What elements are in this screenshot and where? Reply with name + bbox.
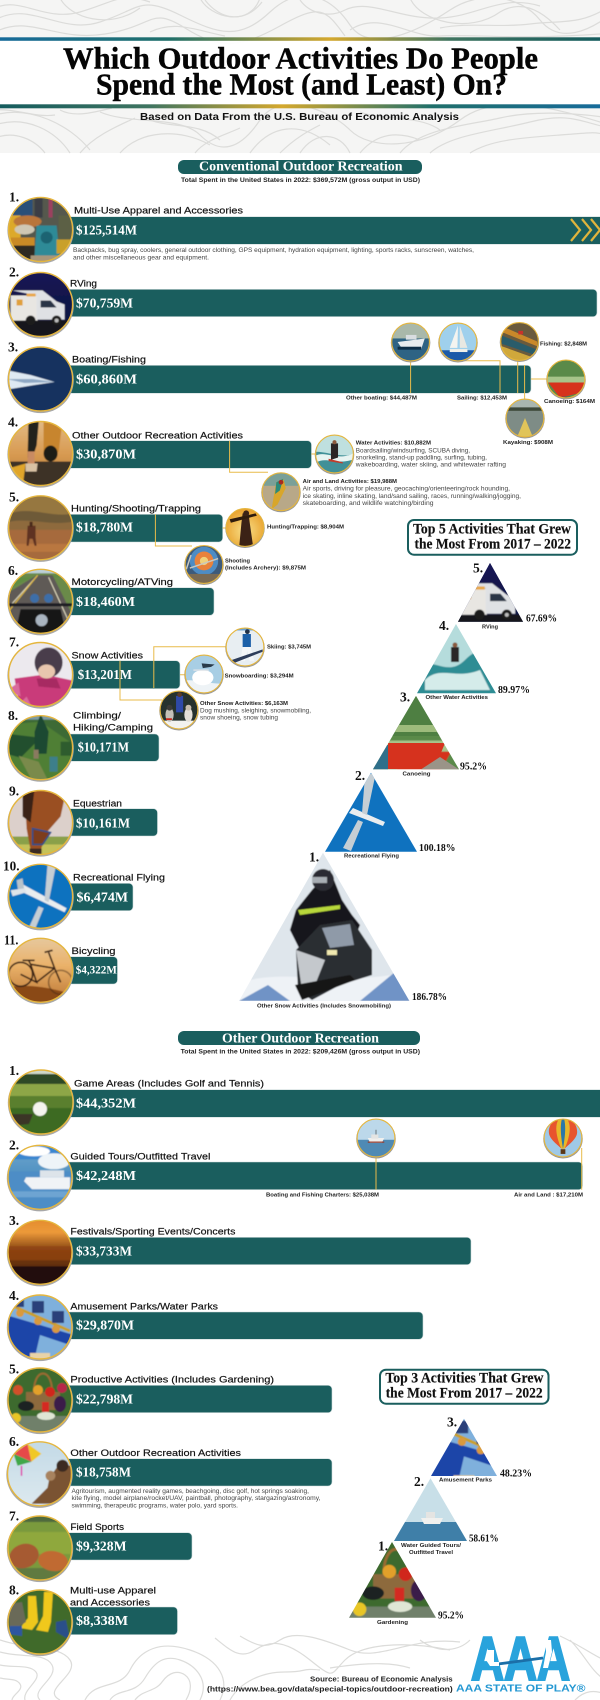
- callout: top 3 activities: [380, 1370, 548, 1404]
- text: air and land activities: Air and Land Activities: $19,988M: [303, 479, 397, 485]
- icon: water activities: [314, 434, 354, 474]
- row 5: hunting/shooting/trapping: (Includes Archery): $9,875M: [225, 566, 306, 572]
- text: water activities: wakeboarding, water skiing, and whitewater rafting: [355, 462, 506, 469]
- logo: AAA State of Play: AAA STATE OF PLAY®: [456, 1683, 586, 1695]
- other row 1: game areas: 1.: [9, 1063, 19, 1078]
- text: air and land activities: [303, 479, 521, 507]
- row 10: recreational flying: Recreational Flying: [73, 872, 165, 883]
- other row 6: other outdoor recreation activities: 6.: [9, 1434, 19, 1449]
- other row 6: other outdoor recreation activities: swimming, therapeutic programs, water polo, yard sports.: [72, 1502, 238, 1509]
- text: air and land activities: ice skating, inline skating, land/sand sailing, races, running/walking/jogging,: [303, 493, 521, 500]
- other row 5: productive activities: Productive Activities (Includes Gardening): [70, 1374, 274, 1385]
- other row 4: amusement parks: [6, 1291, 424, 1362]
- row 7: snow activities: Skiing: $3,745M: [267, 645, 311, 651]
- row 6: motorcycling: 6.: [8, 563, 18, 578]
- other row 3: festivals: 3.: [9, 1213, 19, 1228]
- triangle: gardening 1st: 1.: [378, 1539, 388, 1554]
- source note: (https://www.bea.gov/data/special-topics/outdoor-recreation): [207, 1685, 453, 1694]
- row 10: recreational flying: [4, 862, 164, 930]
- row 7: snow activities: Snow Activities: [72, 650, 143, 661]
- heading: conventional outdoor recreation: Total Spent in the United States in 2022: $369,572M (gross output in USD): [181, 177, 420, 184]
- row 11: bicycling: [4, 936, 118, 1004]
- triangle: water guided tours 2nd: Outfitted Travel: [409, 1550, 453, 1556]
- row 3: boating/fishing: Canoeing: $164M: [544, 399, 595, 405]
- row 3: boating/fishing: [7, 322, 595, 445]
- triangle: canoeing 3rd: Canoeing: [402, 771, 431, 777]
- row 3: boating/fishing: Boating/Fishing: [72, 355, 146, 366]
- row 1: multi-use apparel: and other miscellaneous gear and equipment.: [73, 254, 209, 261]
- icon: chevrons: [571, 219, 600, 241]
- callout: top 3 activities: the Most From 2017 – 2022: [386, 1386, 543, 1402]
- row 3: boating/fishing: $60,860M: [76, 372, 137, 387]
- triangle: other water activities 4th: [417, 621, 529, 699]
- triangle: amusement parks 3rd: 48.23%: [500, 1468, 532, 1479]
- other row 1: game areas: $44,352M: [76, 1096, 136, 1111]
- other row 8: multi-use apparel: 8.: [9, 1583, 19, 1598]
- icon: skiing: [225, 628, 265, 668]
- other row 6: other outdoor recreation activities: Other Outdoor Recreation Activities: [70, 1448, 241, 1459]
- triangle: gardening 1st: Gardening: [377, 1620, 408, 1626]
- row 7: snow activities: Snowboarding: $3,294M: [225, 674, 294, 680]
- row 2: RVing: [7, 268, 598, 339]
- row 2: RVing: RVing: [70, 279, 97, 290]
- text: water activities: snorkeling, stand-up paddling, surfing, tubing,: [356, 455, 487, 462]
- row 4: other outdoor recreation activities: [7, 418, 520, 512]
- other row 4: amusement parks: $29,870M: [76, 1319, 134, 1334]
- triangle: recreational flying 2nd: 2.: [355, 768, 365, 783]
- triangle: canoeing 3rd: 3.: [400, 690, 410, 705]
- other row 2: guided tours: 2.: [9, 1137, 19, 1152]
- title: Spend the Most (and Least) On?: [96, 66, 507, 101]
- row 5: hunting/shooting/trapping: Hunting/Trapping: $8,904M: [267, 524, 344, 530]
- other row 6: other outdoor recreation activities: [6, 1437, 332, 1509]
- row 9: equestrian: 9.: [9, 784, 19, 799]
- other row 2: guided tours: Guided Tours/Outfitted Travel: [70, 1151, 210, 1162]
- row 3: boating/fishing: Kayaking: $908M: [503, 440, 553, 446]
- icon: fishing: [500, 322, 540, 362]
- row 6: motorcycling: $18,460M: [76, 595, 135, 610]
- row 8: climbing/hiking/camping: Hiking/Camping: [73, 723, 153, 734]
- row 7: snow activities: $13,201M: [78, 668, 132, 683]
- icon: boating and fishing charters: [356, 1118, 396, 1158]
- triangle: RVing 5th: [458, 563, 556, 630]
- row 9: equestrian: Equestrian: [73, 799, 122, 810]
- triangle: water guided tours 2nd: Water Guided Tours/: [401, 1543, 461, 1549]
- row 3: boating/fishing: Sailing: $12,453M: [457, 396, 507, 402]
- icon: shooting: [184, 545, 224, 585]
- other row 2: guided tours: $42,248M: [76, 1169, 136, 1184]
- row 11: bicycling: $4,322M: [76, 963, 117, 976]
- icon: kayaking: [505, 398, 545, 438]
- heading: conventional outdoor recreation: [178, 160, 422, 184]
- row 1: multi-use apparel: $125,514M: [76, 224, 137, 239]
- row 7: snow activities: 7.: [9, 635, 19, 650]
- source note: Source: Bureau of Economic Analysis: [310, 1675, 453, 1684]
- heading: other outdoor recreation: Total Spent in the United States in 2022: $209,426M (gross output in USD): [181, 1048, 420, 1055]
- other row 3: festivals: $33,733M: [76, 1244, 132, 1259]
- text: air and land activities: Air sports, driving for pleasure, geocaching/orienteering/rock hounding,: [303, 486, 510, 493]
- callout: top 5 activities: the Most From 2017 – 2022: [414, 536, 571, 552]
- triangle: gardening 1st: 95.2%: [438, 1611, 464, 1622]
- row 9: equestrian: $10,161M: [76, 816, 130, 831]
- row 4: other outdoor recreation activities: 4.: [8, 415, 18, 430]
- other row 5: productive activities: $22,798M: [76, 1392, 133, 1407]
- row 3: boating/fishing: Fishing: $2,848M: [540, 342, 587, 348]
- bottom stripe: [0, 104, 600, 108]
- triangle: RVing 5th: RVing: [482, 624, 498, 630]
- triangle: water guided tours 2nd: 2.: [414, 1474, 424, 1489]
- other row 2: guided tours: [6, 1118, 583, 1212]
- row 10: recreational flying: $6,474M: [76, 891, 128, 906]
- callout: top 3 activities: Top 3 Activities That Grew: [385, 1371, 544, 1387]
- callout: top 5 activities: Top 5 Activities That Grew: [413, 521, 571, 537]
- top stripe: [0, 37, 600, 41]
- triangle: recreational flying 2nd: [320, 768, 455, 860]
- icon: snowboarding: [184, 654, 224, 694]
- other row 1: game areas: Game Areas (Includes Golf and Tennis): [74, 1079, 264, 1090]
- other row 5: productive activities: [6, 1364, 332, 1434]
- triangle: amusement parks 3rd: [431, 1418, 531, 1482]
- header topographic background: [0, 0, 600, 153]
- triangle: other snow activities 1st: 1.: [309, 850, 319, 865]
- triangle: other snow activities 1st: [235, 850, 447, 1009]
- source note: [207, 1675, 453, 1694]
- other row 3: festivals: Festivals/Sporting Events/Concerts: [70, 1227, 236, 1238]
- triangle: recreational flying 2nd: Recreational Flying: [344, 854, 399, 860]
- icon: hunting: [225, 508, 265, 548]
- row 9: equestrian: [7, 786, 158, 857]
- row 8: climbing/hiking/camping: 8.: [8, 708, 18, 723]
- row 10: recreational flying: 10.: [3, 859, 20, 874]
- icon: sailing: [438, 322, 478, 362]
- text: water activities: Boardsailing/windsurfing, SCUBA diving,: [356, 447, 470, 454]
- triangle: other water activities 4th: 4.: [439, 618, 449, 633]
- triangle: water guided tours 2nd: [394, 1477, 498, 1554]
- logo: AAA State of Play: AAA: [471, 1625, 570, 1693]
- row 3: boating/fishing: 3.: [8, 340, 18, 355]
- icon: other snow activities: [159, 690, 199, 730]
- row 1: multi-use apparel: 1.: [9, 190, 19, 205]
- row 5: hunting/shooting/trapping: [7, 492, 344, 585]
- text: other snow activities: Other Snow Activities: $6,163M: [200, 701, 288, 707]
- row 4: other outdoor recreation activities: $30,870M: [76, 447, 136, 462]
- icon: other boating: [390, 322, 430, 362]
- other row 7: field sports: $9,328M: [76, 1539, 126, 1554]
- other row 6: other outdoor recreation activities: kite flying, model airplane/rocket/UAV, paintball, photography, stargazing/astronomy,: [72, 1495, 321, 1502]
- row 8: climbing/hiking/camping: [7, 711, 160, 782]
- triangle: canoeing 3rd: 95.2%: [460, 761, 487, 772]
- heading: other outdoor recreation: Other Outdoor Recreation: [222, 1032, 379, 1047]
- text: air and land activities: skateboarding, and wildlife watching/birding: [303, 500, 434, 507]
- row 11: bicycling: 11.: [4, 932, 18, 947]
- other row 5: productive activities: 5.: [9, 1361, 19, 1376]
- other row 7: field sports: 7.: [9, 1509, 19, 1524]
- other row 4: amusement parks: Amusement Parks/Water Parks: [70, 1301, 218, 1312]
- triangle: recreational flying 2nd: 100.18%: [419, 843, 455, 854]
- heading: other outdoor recreation: [178, 1031, 420, 1055]
- text: other snow activities: Dog mushing, sleighing, snowmobiling,: [200, 708, 311, 715]
- text: other snow activities: snow shoeing, snow tubing: [200, 714, 278, 721]
- row 6: motorcycling: Motorcycling/ATVing: [72, 577, 173, 588]
- row 5: hunting/shooting/trapping: Hunting/Shooting/Trapping: [71, 504, 201, 515]
- other row 3: festivals: [6, 1216, 472, 1286]
- icon: hot air balloon: [543, 1118, 583, 1158]
- row 4: other outdoor recreation activities: Other Outdoor Recreation Activities: [72, 430, 243, 441]
- row 5: hunting/shooting/trapping: $18,780M: [76, 521, 133, 536]
- other row 2: guided tours: Boating and Fishing Charters: $25,038M: [266, 1192, 379, 1198]
- triangle: other water activities 4th: 89.97%: [498, 685, 530, 696]
- text: other snow activities: [200, 701, 311, 721]
- triangle: other water activities 4th: Other Water Activities: [426, 695, 488, 701]
- triangle: RVing 5th: 67.69%: [526, 614, 557, 625]
- row 2: RVing: $70,759M: [76, 296, 133, 311]
- title: Which Outdoor Activities Do People: [63, 40, 538, 75]
- other row 7: field sports: [6, 1512, 192, 1582]
- other row 8: multi-use apparel: Multi-use Apparel: [70, 1586, 156, 1597]
- icon: canoeing: [546, 360, 586, 400]
- row 3: boating/fishing: Other boating: $44,487M: [346, 396, 417, 402]
- triangle: other snow activities 1st: Other Snow Activities (Includes Snowmobiling): [257, 1003, 391, 1009]
- other row 6: other outdoor recreation activities: $18,758M: [76, 1466, 131, 1481]
- title: [63, 40, 538, 101]
- other row 1: game areas: [8, 1066, 600, 1136]
- other row 8: multi-use apparel: [0, 1572, 178, 1672]
- row 1: multi-use apparel: Backpacks, bug spray, coolers, general outdoor clothing, GPS equipment, hydration equipment, lighting, sports racks, sunscreen, watches,: [73, 247, 474, 254]
- text: water activities: [355, 441, 506, 469]
- subtitle: Based on Data From the U.S. Bureau of Economic Analysis: [140, 111, 459, 123]
- heading: conventional outdoor recreation: Conventional Outdoor Recreation: [199, 160, 403, 174]
- row 1: multi-use apparel: Multi-Use Apparel and Accessories: [74, 206, 243, 217]
- row 7: snow activities: [7, 628, 311, 730]
- row 6: motorcycling: [7, 566, 214, 636]
- other row 6: other outdoor recreation activities: Agritourism, augmented reality games, beachgoing, disc golf, hot springs soaking,: [72, 1488, 309, 1495]
- text: water activities: Water Activities: $10,882M: [356, 441, 431, 447]
- triangle: other snow activities 1st: 186.78%: [412, 992, 447, 1003]
- footer topographic background: [0, 1635, 600, 1700]
- row 11: bicycling: Bicycling: [72, 946, 116, 957]
- triangle: amusement parks 3rd: Amusement Parks: [439, 1477, 492, 1483]
- row 5: hunting/shooting/trapping: 5.: [9, 490, 19, 505]
- triangle: water guided tours 2nd: 58.61%: [469, 1533, 499, 1544]
- row 5: hunting/shooting/trapping: Shooting: [225, 558, 250, 564]
- row 8: climbing/hiking/camping: Climbing/: [73, 711, 121, 722]
- other row 8: multi-use apparel: and Accessories: [70, 1597, 150, 1608]
- other row 7: field sports: Field Sports: [70, 1522, 124, 1533]
- row 8: climbing/hiking/camping: $10,171M: [78, 741, 129, 756]
- callout: top 5 activities: [408, 520, 577, 555]
- row 2: RVing: 2.: [9, 265, 19, 280]
- triangle: canoeing 3rd: [373, 692, 486, 776]
- triangle: RVing 5th: 5.: [473, 561, 483, 576]
- other row 2: guided tours: Air and Land : $17,210M: [514, 1192, 583, 1198]
- icon: air and land activities: [261, 472, 301, 512]
- other row 4: amusement parks: 4.: [9, 1288, 19, 1303]
- other row 8: multi-use apparel: $8,338M: [76, 1614, 128, 1629]
- row 1: multi-use apparel: [7, 192, 600, 264]
- triangle: gardening 1st: [349, 1542, 464, 1625]
- triangle: amusement parks 3rd: 3.: [447, 1415, 457, 1430]
